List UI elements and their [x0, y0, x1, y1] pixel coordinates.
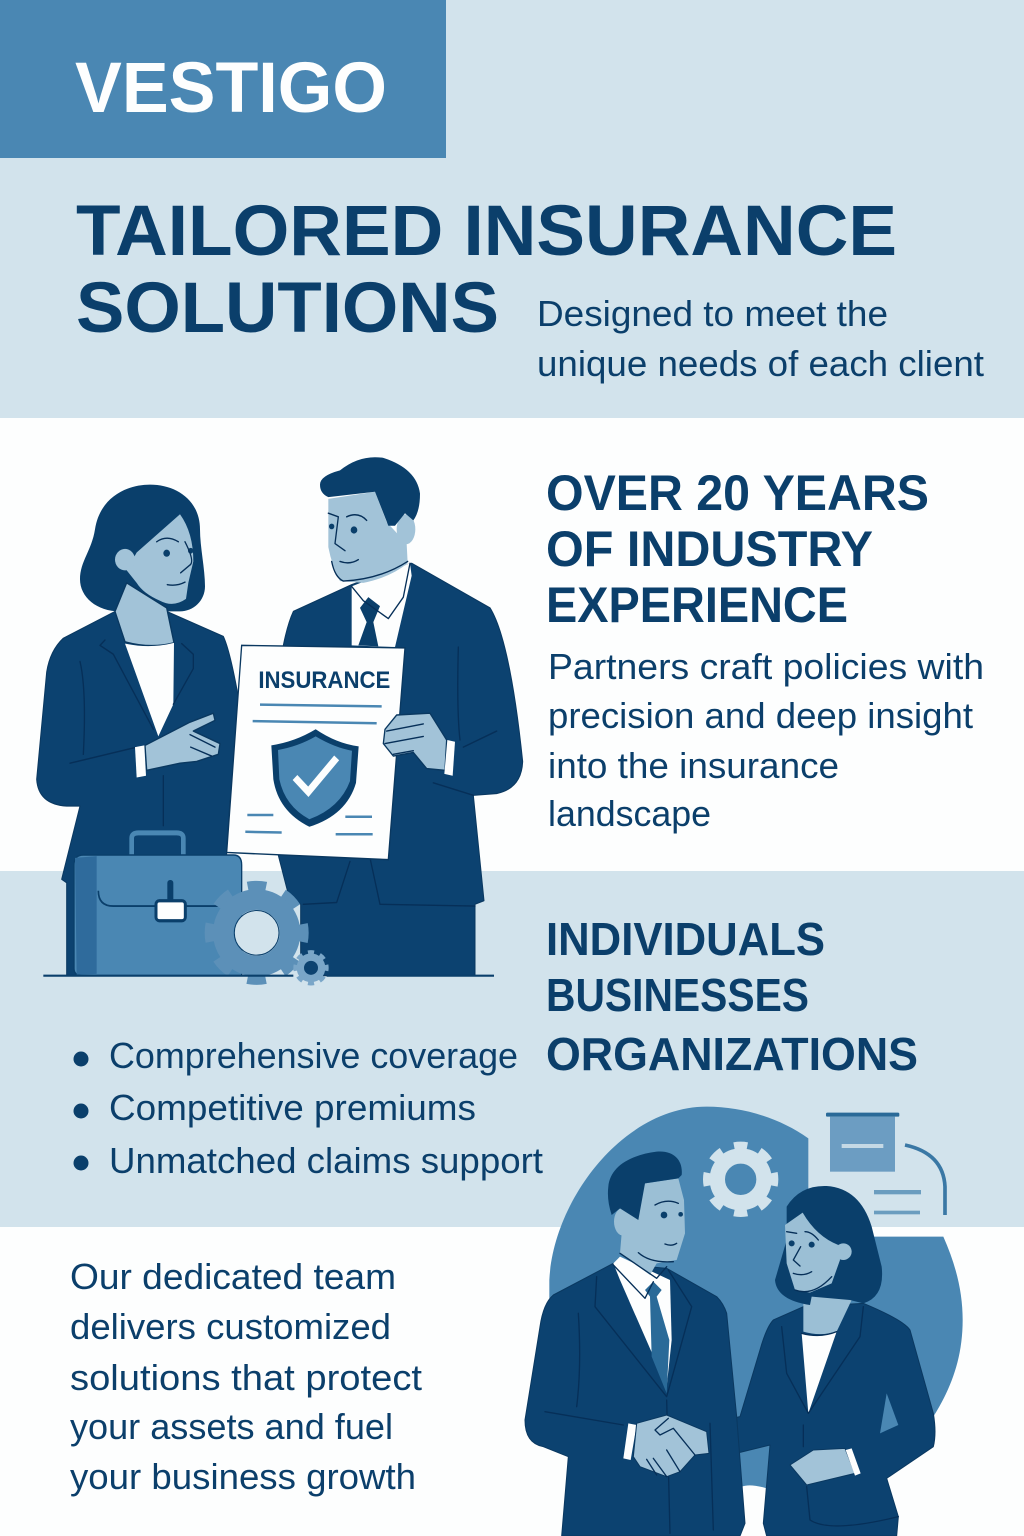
heading: client types: BUSINESSES	[546, 969, 809, 1021]
document icon	[826, 1113, 945, 1215]
header: brand block: VESTIGO	[75, 49, 387, 128]
subtitle: unique needs of each client	[537, 343, 984, 384]
man partner	[525, 1151, 745, 1536]
text: dedicated team: solutions that protect	[70, 1357, 422, 1398]
text: partners description: into the insurance	[548, 745, 839, 786]
header: brand block	[0, 0, 446, 158]
bullet list: benefits	[74, 1035, 543, 1181]
bullet list: benefits: Unmatched claims support	[109, 1140, 543, 1181]
blue backdrop	[549, 1107, 963, 1488]
heading: experience: OF INDUSTRY	[546, 521, 873, 577]
text: partners description: precision and deep insight	[548, 695, 973, 736]
heading: client types: INDIVIDUALS	[546, 913, 825, 965]
text: dedicated team: delivers customized	[70, 1306, 391, 1347]
text: dedicated team: your business growth	[70, 1456, 416, 1497]
illustration: handshake between partners	[525, 1107, 963, 1536]
text: dedicated team: Our dedicated team	[70, 1256, 396, 1297]
floor line	[43, 973, 494, 979]
title	[76, 192, 897, 348]
text: dedicated team: your assets and fuel	[70, 1406, 393, 1447]
text: partners description: landscape	[548, 793, 711, 834]
heading: client types: ORGANIZATIONS	[546, 1028, 918, 1080]
title: TAILORED INSURANCE	[76, 192, 897, 271]
subtitle: Designed to meet the	[537, 293, 888, 334]
insurance document: INSURANCE	[258, 667, 390, 693]
heading: experience: EXPERIENCE	[546, 577, 848, 633]
subtitle	[537, 293, 984, 384]
heading: client types	[546, 913, 918, 1080]
bullet list: benefits: Competitive premiums	[109, 1087, 476, 1128]
handshake	[633, 1415, 709, 1477]
woman consultant	[37, 485, 238, 976]
briefcase	[74, 833, 242, 976]
text: partners description: Partners craft policies with	[548, 646, 984, 687]
text: dedicated team	[70, 1256, 422, 1497]
hand holding document	[383, 713, 455, 776]
heading: experience	[546, 465, 929, 633]
shield with check	[271, 729, 359, 827]
gear icon large	[210, 886, 303, 980]
man consultant	[263, 457, 523, 976]
heading: experience: OVER 20 YEARS	[546, 465, 929, 521]
illustration: consultants holding insurance document	[37, 457, 523, 983]
woman partner	[709, 1186, 935, 1536]
title: SOLUTIONS	[76, 269, 499, 348]
gear icon small	[296, 953, 326, 983]
insurance document	[227, 645, 405, 860]
gear icon	[708, 1147, 773, 1212]
bullet list: benefits: Comprehensive coverage	[109, 1035, 518, 1076]
text: partners description	[548, 646, 984, 834]
